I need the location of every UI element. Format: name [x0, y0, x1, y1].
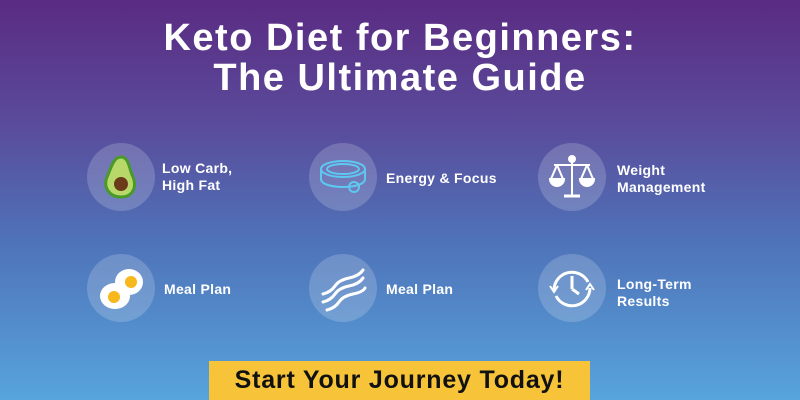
- label: low carb: Low Carb,: [162, 160, 232, 176]
- icon: clock: [538, 254, 606, 322]
- label: weight: Weight: [617, 162, 665, 178]
- label: long-term: Long-Term: [617, 276, 692, 292]
- label: meal plan 1: Meal Plan: [164, 281, 231, 297]
- label: meal plan 2: Meal Plan: [386, 281, 453, 297]
- label: energy: Energy & Focus: [386, 170, 497, 186]
- label: weight: Management: [617, 179, 706, 195]
- icon: scale: [538, 143, 606, 211]
- title: The Ultimate Guide: [213, 57, 587, 99]
- icon: eggs: [87, 254, 155, 322]
- button: Start Your Journey Today!: [235, 366, 564, 394]
- label: long-term: [617, 276, 692, 309]
- icon: avocado: [87, 143, 155, 211]
- label: weight: [617, 162, 706, 195]
- icon: bacon: [309, 254, 377, 322]
- button: [209, 361, 590, 400]
- label: low carb: High Fat: [162, 177, 220, 193]
- title: Keto Diet for Beginners:: [163, 17, 637, 59]
- label: low carb: [162, 160, 232, 193]
- title: [163, 17, 637, 99]
- label: long-term: Results: [617, 293, 670, 309]
- icon: energy: [309, 143, 377, 211]
